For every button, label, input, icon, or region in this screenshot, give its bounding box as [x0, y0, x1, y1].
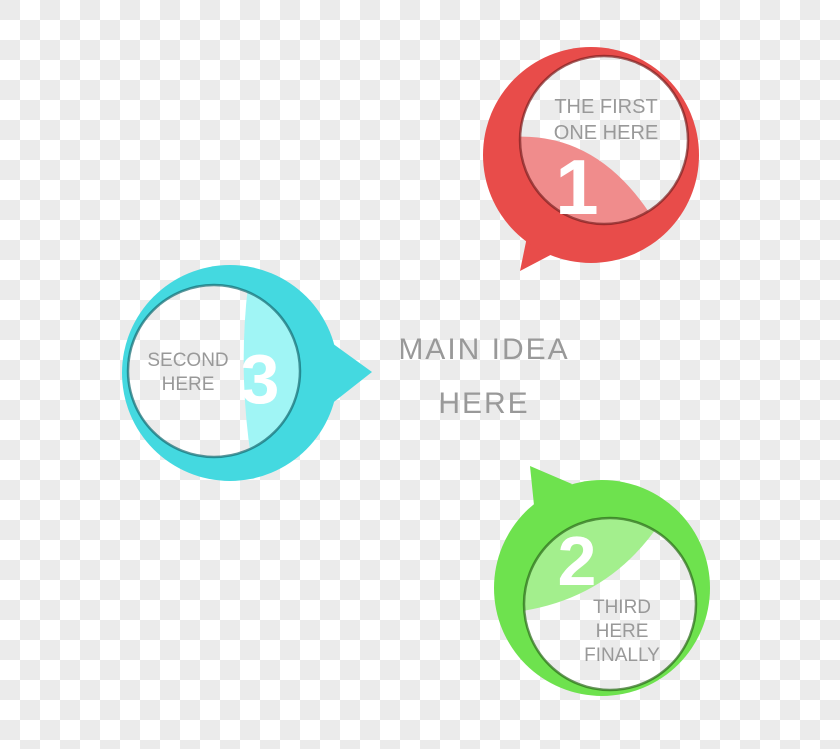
badge: third (green): HERE — [596, 621, 648, 642]
main idea text: MAIN IDEA — [398, 333, 570, 366]
badge: first (red) — [483, 47, 699, 271]
badge: second (cyan) — [122, 265, 372, 481]
badge: second (cyan): HERE — [162, 374, 214, 395]
badge: third (green): FINALLY — [584, 645, 660, 666]
number 1: 1 — [555, 143, 599, 231]
badge: third (green) — [494, 466, 710, 696]
text: second: SECOND — [147, 350, 229, 371]
number 2: 2 — [558, 522, 596, 600]
main idea text: HERE — [438, 387, 530, 420]
badge: first (red): ONE HERE — [554, 122, 658, 144]
number 3: 3 — [241, 340, 279, 418]
main idea text — [398, 333, 570, 420]
text: third: THIRD — [593, 597, 651, 618]
text: first: THE FIRST — [554, 96, 658, 118]
